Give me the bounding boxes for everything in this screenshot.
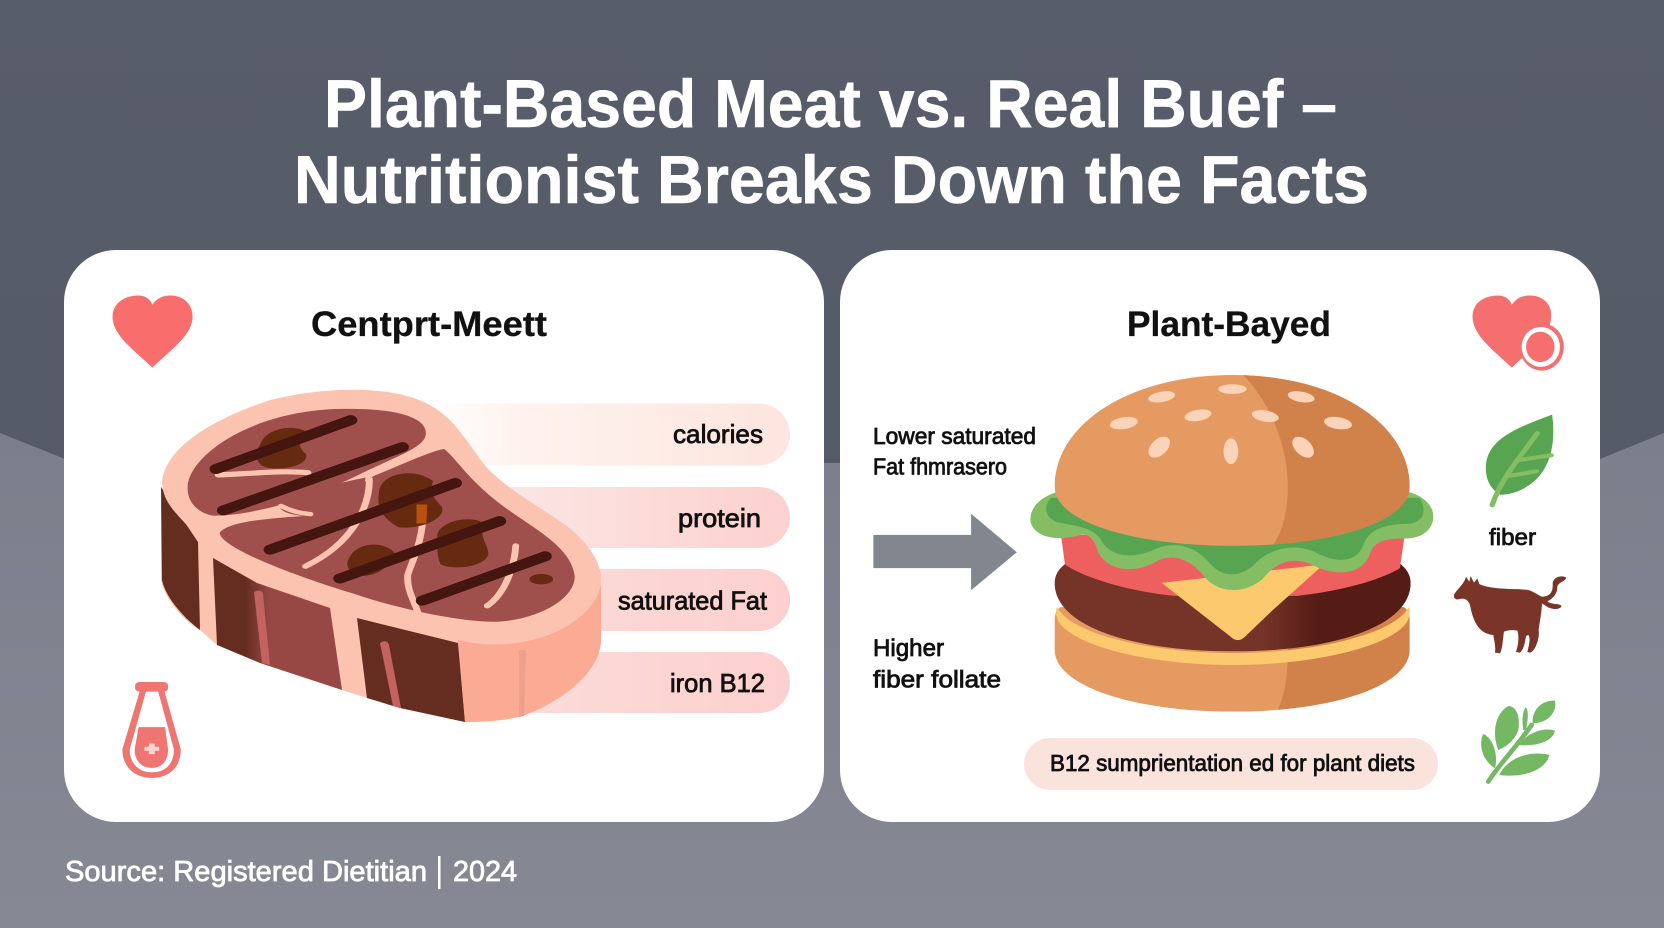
text: higher fiber folate [873,635,1001,694]
lettuce [1030,492,1433,590]
sesame seeds [1108,384,1354,464]
panel: conventional meat [64,250,824,822]
steak seared spots [257,428,553,584]
text: lower saturated fat [873,423,1036,480]
title: Nutritionist Breaks Down the Facts [294,142,1369,218]
callout: B12 [1024,738,1438,790]
nutrient bar: saturated fat: saturated Fat [618,586,768,616]
arrow [873,514,1017,590]
label: fiber: fiber [1489,524,1536,550]
icon: cow [1454,576,1566,653]
patty [1054,564,1411,652]
illustration: steak [161,390,601,722]
nutrient bar: iron B12 [500,652,790,713]
icon: heart [113,295,193,368]
top bun [1051,372,1415,550]
cheese slice [1162,564,1324,640]
cheese band [1056,607,1410,665]
source footer: 2024 [453,856,517,888]
heading: conventional meat: Centprt-Meett [311,305,547,344]
source footer: Source: Registered Dietitian [65,856,427,888]
steak meat [188,409,426,516]
nutrient bar: saturated fat [500,569,790,631]
title: Plant-Based Meat vs. Real Buef – [324,66,1337,142]
icon: leaf [1486,415,1553,505]
steak fat veins [218,472,516,614]
callout: B12: B12 sumprientation ed for plant diets [1050,750,1415,776]
illustration: burger [1030,372,1433,716]
title [294,66,1369,218]
panel: plant-based [840,250,1600,822]
tomato [1061,535,1405,596]
nutrient bar: iron B12: iron B12 [670,668,765,698]
steak grill marks [216,420,545,601]
steak side [161,487,601,722]
heading: plant-based: Plant-Bayed [1127,305,1331,344]
icon: herb sprig [1481,701,1555,782]
icon: heart with circle [1473,295,1564,371]
text: lower saturated fat: Fat fhmrasero [873,454,1007,480]
text: higher fiber folate: Higher [873,635,944,662]
nutrient bar: calories: calories [673,419,763,449]
steak top fat rim [162,390,601,644]
icon: bottle [122,682,181,778]
nutrient bar: protein [480,487,790,548]
nutrient bar: protein: protein [678,503,761,533]
nutrient bar: calories [420,404,790,466]
steak top [162,390,601,644]
bottom bun [1051,605,1415,716]
text: lower saturated fat: Lower saturated [873,423,1036,449]
text: higher fiber folate: fiber follate [873,666,1001,694]
